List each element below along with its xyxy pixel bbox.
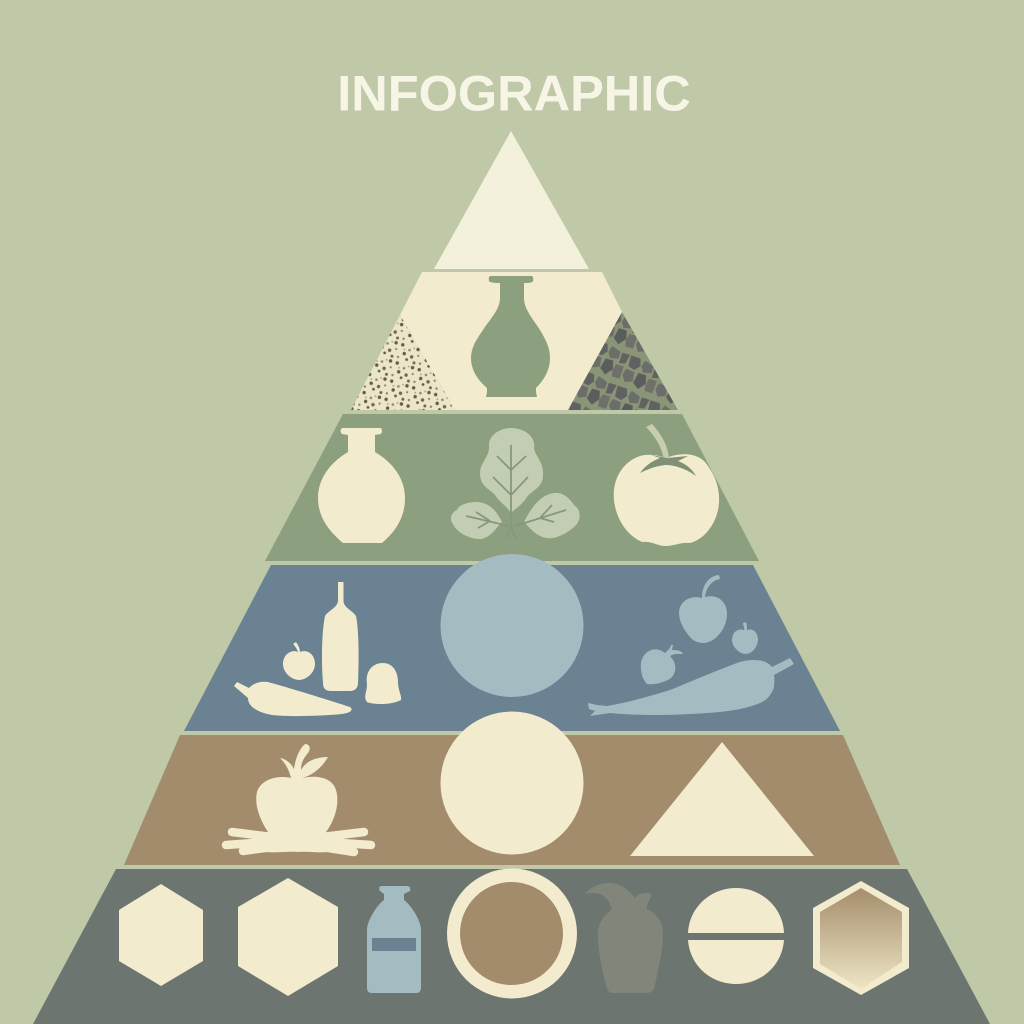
icon: apple with leaves <box>226 744 371 852</box>
icon: large hexagon <box>238 878 338 996</box>
icon: large apple <box>679 575 727 643</box>
icon: tall bottle <box>322 582 359 691</box>
tier 6 background <box>33 869 990 1024</box>
icon: small hexagon <box>119 884 203 986</box>
icon: leaf sprig <box>451 428 580 539</box>
tier 3 background <box>265 414 759 561</box>
large circle <box>440 554 584 697</box>
tier 2 background <box>400 272 622 410</box>
icon: tilted apple <box>641 645 683 684</box>
icon: small apple right <box>732 622 758 654</box>
tier 1: apex triangle <box>434 131 589 269</box>
icon: rounded blob <box>365 663 401 704</box>
icon: jug silhouette <box>585 883 663 993</box>
tier 4 background <box>184 565 840 731</box>
icon: split circle <box>688 888 784 984</box>
texture: speckled triangle <box>351 315 455 410</box>
icon: carrot <box>234 682 352 716</box>
tier 4: blue band <box>184 554 840 731</box>
triangle <box>630 742 814 856</box>
icon: small apple <box>283 642 315 680</box>
tier 5: brown band <box>124 712 900 865</box>
icon: round flask <box>318 428 405 543</box>
texture: cobblestone triangle <box>568 312 678 410</box>
icon: hexagon with gradient <box>813 881 909 995</box>
icon: brown circle with ring <box>447 868 577 998</box>
icon: carrot right <box>588 658 794 716</box>
tier 3: green band <box>265 414 759 561</box>
tier 6: grey band <box>33 868 990 1024</box>
tier 5 background <box>124 735 900 865</box>
icon: tomato <box>614 424 719 546</box>
title: INFOGRAPHIC <box>337 64 691 122</box>
icon: vase <box>471 276 550 397</box>
tier 2: cream panel with vase and textures <box>351 272 678 410</box>
icon: labelled bottle <box>367 886 421 993</box>
large cream circle <box>440 712 584 854</box>
